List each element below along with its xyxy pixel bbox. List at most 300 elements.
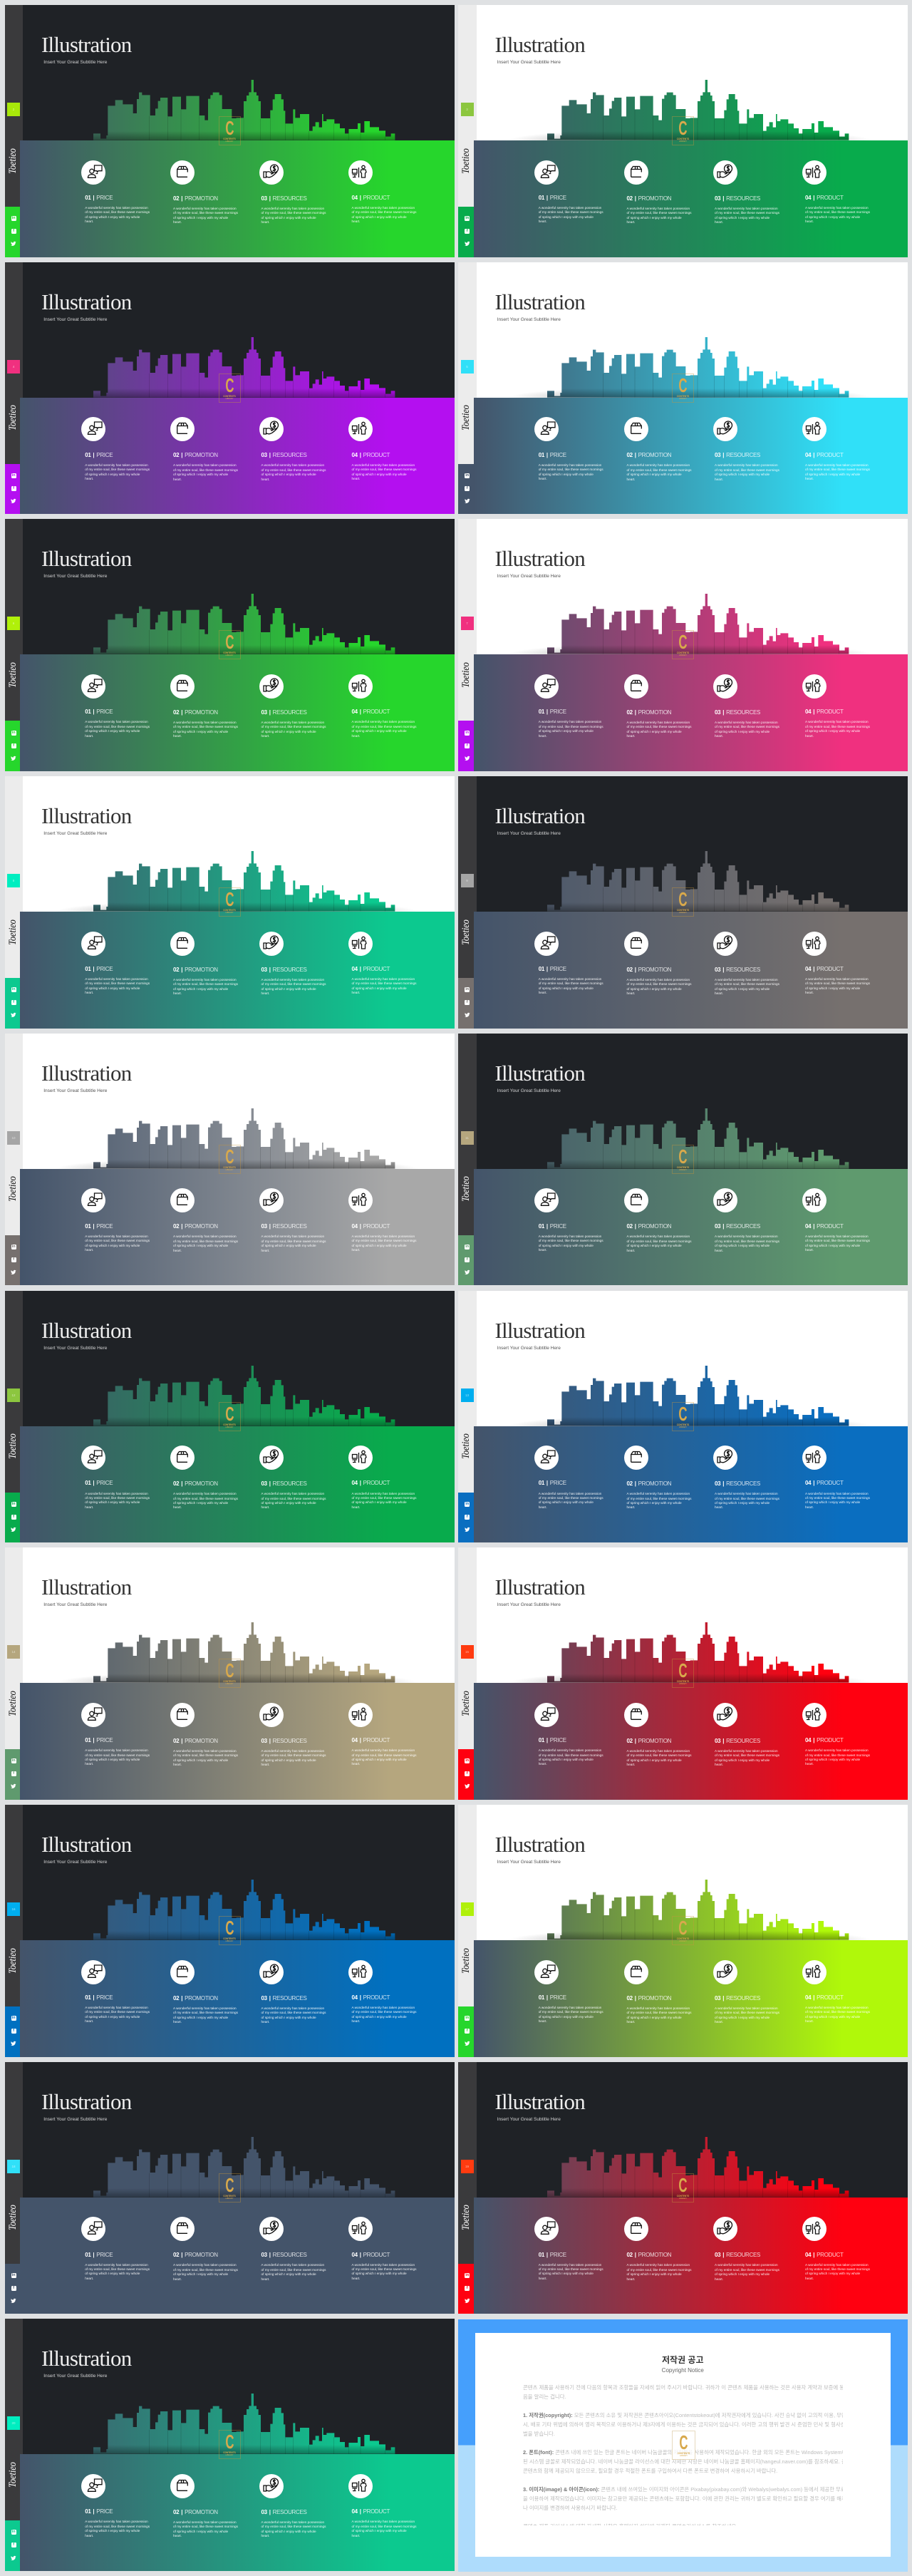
brand: Toetieo bbox=[460, 2205, 471, 2230]
feature 04 bbox=[802, 1446, 886, 1517]
feature 01: A wonderful serenity has taken possession bbox=[85, 2520, 148, 2523]
feature 03: of my entire soul, like these sweet mornings bbox=[715, 1497, 779, 1500]
brand: Toetieo bbox=[460, 1691, 471, 1716]
page number bbox=[460, 1131, 473, 1145]
skyline bbox=[93, 851, 395, 912]
notice text: 콘텐츠와 함께 제공되지 않으므로, 필요할 경우 적절한 폰트를 구입하여서 다른 폰트로 변경하여 사용하시기 바랍니다. bbox=[523, 2468, 777, 2474]
feature 03 bbox=[713, 160, 779, 224]
gradient panel bbox=[20, 1426, 455, 1542]
feature 01: of my entire soul, like these sweet mornings bbox=[539, 468, 603, 471]
feature 01: of spring which I enjoy with my whole bbox=[85, 729, 140, 733]
feature 01 bbox=[81, 674, 150, 738]
feature 01 bbox=[81, 932, 150, 994]
feature 02: of my entire soul, like these sweet mornings bbox=[173, 1240, 238, 1243]
logo badge: CONTENTS bbox=[677, 1423, 689, 1426]
panel: slide 5 light cyan bbox=[458, 262, 908, 514]
skyline bbox=[547, 594, 849, 654]
social icons: in bbox=[12, 1245, 16, 1249]
page number: 10 bbox=[11, 1136, 16, 1140]
feature 04: of my entire soul, like these sweet mornings bbox=[805, 725, 870, 728]
page number: 9 bbox=[466, 879, 468, 882]
feature 03: 03 | RESOURCES bbox=[261, 2252, 307, 2258]
feature 01: of spring which I enjoy with my whole bbox=[85, 473, 140, 476]
feature 01 bbox=[81, 2217, 165, 2288]
feature 02: 02 | PROMOTION bbox=[173, 452, 218, 458]
subtitle: Insert Your Great Subtitle Here bbox=[497, 1346, 561, 1350]
feature 02: heart. bbox=[627, 2277, 636, 2281]
social icons bbox=[458, 721, 473, 771]
feature 03: of spring which I enjoy with my whole bbox=[715, 473, 770, 476]
logo badge: LIBRARY bbox=[679, 1683, 687, 1685]
feature 04: of spring which I enjoy with my whole bbox=[352, 1500, 407, 1504]
subtitle: Insert Your Great Subtitle Here bbox=[497, 2117, 561, 2122]
title: Illustration bbox=[41, 1061, 131, 1086]
feature 01: heart. bbox=[85, 991, 93, 994]
panel: slide 20 dark teal bbox=[4, 2319, 455, 2571]
feature 04 bbox=[802, 2217, 886, 2288]
page number: 11 bbox=[465, 1136, 469, 1140]
feature 03: heart. bbox=[715, 220, 723, 224]
feature 01: 01 | PRICE bbox=[85, 452, 113, 458]
feature 01: of spring which I enjoy with my whole bbox=[85, 2529, 140, 2533]
social icons: in bbox=[12, 1758, 16, 1763]
feature 02 bbox=[624, 674, 691, 738]
feature 02 bbox=[170, 2474, 254, 2545]
feature 04: heart. bbox=[352, 1248, 361, 1252]
feature 03: 03 | RESOURCES bbox=[261, 1480, 307, 1487]
social icons: in bbox=[12, 2016, 16, 2020]
logo badge: LIBRARY bbox=[225, 654, 234, 656]
social icons: f bbox=[13, 1771, 14, 1776]
feature 01: of spring which I enjoy with my whole bbox=[539, 1244, 594, 1247]
feature 03 bbox=[713, 932, 779, 995]
feature 01: of my entire soul, like these sweet mornings bbox=[539, 725, 603, 728]
brand: Toetieo bbox=[6, 405, 18, 431]
social icons bbox=[4, 2520, 20, 2571]
feature 03: 03 | RESOURCES bbox=[261, 1738, 307, 1744]
feature 03: 03 | RESOURCES bbox=[261, 195, 307, 202]
feature 01: of spring which I enjoy with my whole bbox=[539, 2015, 594, 2019]
feature 03 bbox=[713, 674, 779, 738]
feature 04: of my entire soul, like these sweet mornings bbox=[805, 1496, 870, 1500]
feature 03 bbox=[712, 2217, 797, 2288]
skyline bbox=[546, 1350, 866, 1426]
feature 01: A wonderful serenity has taken possession bbox=[85, 2263, 148, 2267]
feature 01: 01 | PRICE bbox=[539, 452, 566, 458]
feature 02: A wonderful serenity has taken possession bbox=[173, 1235, 237, 1238]
feature 04: of my entire soul, like these sweet mornings bbox=[805, 468, 870, 471]
feature 02: A wonderful serenity has taken possession bbox=[627, 978, 690, 982]
social icons bbox=[4, 464, 20, 514]
feature 04: of spring which I enjoy with my whole bbox=[805, 473, 860, 476]
logo badge bbox=[218, 1145, 241, 1174]
sidebar bbox=[458, 262, 476, 464]
feature 02: of spring which I enjoy with my whole bbox=[173, 1758, 228, 1762]
feature 03: of spring which I enjoy with my whole bbox=[261, 1244, 316, 1247]
social icons bbox=[458, 1493, 473, 1542]
feature 02: A wonderful serenity has taken possession bbox=[173, 2263, 237, 2267]
feature 01: heart. bbox=[539, 2019, 547, 2023]
feature 03: 03 | RESOURCES bbox=[715, 1995, 760, 2001]
feature 03: of spring which I enjoy with my whole bbox=[261, 730, 316, 733]
feature 03: heart. bbox=[715, 2277, 723, 2281]
feature 02 bbox=[624, 1446, 708, 1517]
feature 02: heart. bbox=[173, 220, 182, 224]
feature 03 bbox=[259, 1188, 343, 1259]
feature 01 bbox=[534, 1446, 618, 1517]
logo badge bbox=[672, 630, 694, 659]
feature 01: A wonderful serenity has taken possession bbox=[539, 720, 601, 723]
feature 03: of my entire soul, like these sweet mornings bbox=[261, 1240, 326, 1243]
feature 03: of spring which I enjoy with my whole bbox=[715, 1244, 770, 1247]
feature 04: A wonderful serenity has taken possession bbox=[805, 463, 869, 467]
feature 03: heart. bbox=[261, 734, 269, 738]
brand: Toetieo bbox=[460, 1948, 471, 1973]
feature 01: 01 | PRICE bbox=[85, 195, 113, 201]
social icons bbox=[4, 978, 20, 1028]
logo badge: C bbox=[225, 1403, 234, 1424]
feature 01: of my entire soul, like these sweet mornings bbox=[85, 2010, 150, 2014]
feature 01: A wonderful serenity has taken possession bbox=[85, 463, 148, 467]
skyline bbox=[93, 80, 395, 140]
feature 02 bbox=[170, 160, 238, 224]
feature 02: A wonderful serenity has taken possession bbox=[173, 2006, 237, 2010]
subtitle: Insert Your Great Subtitle Here bbox=[43, 1860, 107, 1865]
feature 03 bbox=[259, 1960, 343, 2031]
logo badge: LIBRARY bbox=[679, 398, 687, 400]
feature 02: of my entire soul, like these sweet mornings bbox=[173, 1753, 238, 1757]
feature 02: 02 | PROMOTION bbox=[173, 1480, 218, 1487]
logo badge bbox=[218, 1659, 241, 1688]
feature 04: of spring which I enjoy with my whole bbox=[805, 1500, 860, 1504]
feature 02: A wonderful serenity has taken possession bbox=[173, 978, 237, 982]
logo badge: CONTENTS bbox=[223, 1937, 236, 1940]
feature 03: A wonderful serenity has taken possession bbox=[261, 1235, 324, 1238]
logo badge: C bbox=[225, 1659, 234, 1681]
social icons: in bbox=[12, 473, 16, 478]
feature 04: A wonderful serenity has taken possession bbox=[352, 2520, 415, 2523]
feature 01 bbox=[81, 1703, 165, 1774]
feature 03: of my entire soul, like these sweet mornings bbox=[715, 2011, 779, 2014]
feature 03 bbox=[713, 417, 779, 481]
feature 01 bbox=[534, 417, 603, 480]
feature 02: 02 | PROMOTION bbox=[173, 1995, 218, 2001]
gradient panel bbox=[473, 140, 908, 257]
feature 04: 04 | PRODUCT bbox=[352, 709, 390, 715]
feature 03: of spring which I enjoy with my whole bbox=[715, 215, 770, 220]
social icons: in bbox=[465, 731, 469, 735]
page number bbox=[7, 2160, 20, 2173]
feature 01: A wonderful serenity has taken possession bbox=[85, 2006, 148, 2009]
feature 02: heart. bbox=[173, 478, 182, 481]
page number: 3 bbox=[466, 108, 468, 111]
feature 02: of spring which I enjoy with my whole bbox=[627, 1244, 682, 1247]
feature 03: of spring which I enjoy with my whole bbox=[261, 2016, 316, 2019]
subtitle: Insert Your Great Subtitle Here bbox=[43, 317, 107, 322]
feature 01: heart. bbox=[85, 1762, 93, 1766]
sidebar bbox=[458, 2062, 476, 2264]
page number bbox=[7, 617, 20, 630]
feature 01 bbox=[534, 2217, 618, 2288]
logo badge: CONTENTS bbox=[223, 651, 236, 654]
logo badge: CONTENTS bbox=[677, 395, 689, 398]
title: Illustration bbox=[494, 2089, 585, 2114]
feature 02 bbox=[624, 1703, 708, 1774]
feature 02: of spring which I enjoy with my whole bbox=[173, 1244, 228, 1247]
feature 04: 04 | PRODUCT bbox=[805, 2252, 844, 2258]
subtitle: Insert Your Great Subtitle Here bbox=[43, 2117, 107, 2122]
feature 01: 01 | PRICE bbox=[85, 2508, 113, 2515]
social icons: in bbox=[465, 2016, 469, 2020]
feature 01: A wonderful serenity has taken possession bbox=[539, 1492, 601, 1495]
feature 04: heart. bbox=[352, 1762, 361, 1766]
feature 02: heart. bbox=[173, 1763, 182, 1766]
page number: 14 bbox=[11, 1650, 16, 1654]
feature 03: of spring which I enjoy with my whole bbox=[261, 2272, 316, 2276]
feature 04 bbox=[348, 160, 416, 223]
logo badge: C bbox=[225, 117, 234, 139]
sidebar bbox=[4, 5, 23, 207]
title: Illustration bbox=[494, 1061, 585, 1086]
feature 01: 01 | PRICE bbox=[85, 709, 113, 715]
gradient panel bbox=[20, 2198, 455, 2314]
panel: slide 15 light red bbox=[458, 1547, 908, 1800]
subtitle: Insert Your Great Subtitle Here bbox=[497, 1602, 561, 1607]
feature 01: of my entire soul, like these sweet mornings bbox=[85, 1753, 150, 1757]
feature 03: A wonderful serenity has taken possession bbox=[261, 2006, 324, 2010]
feature 03: A wonderful serenity has taken possession bbox=[715, 463, 778, 467]
panel: slide 12 dark green bbox=[4, 1290, 455, 1542]
feature 03: of spring which I enjoy with my whole bbox=[261, 1758, 316, 1762]
panel: slide 2 dark green bbox=[4, 5, 455, 257]
feature 01: of my entire soul, like these sweet mornings bbox=[85, 1239, 150, 1242]
feature 02 bbox=[624, 1960, 708, 2031]
social icons: f bbox=[13, 2029, 14, 2033]
feature 02: 02 | PROMOTION bbox=[173, 709, 218, 716]
feature 02: of spring which I enjoy with my whole bbox=[627, 1501, 682, 1505]
sidebar bbox=[4, 1547, 23, 1749]
social icons: f bbox=[467, 2029, 468, 2033]
feature 02: 02 | PROMOTION bbox=[173, 1738, 218, 1744]
logo badge bbox=[218, 1916, 241, 1945]
feature 03: of spring which I enjoy with my whole bbox=[715, 1501, 770, 1505]
feature 04: heart. bbox=[352, 2277, 361, 2280]
feature 03: of my entire soul, like these sweet mornings bbox=[715, 211, 779, 215]
skyline bbox=[547, 80, 849, 140]
feature 03: A wonderful serenity has taken possession bbox=[261, 1492, 324, 1495]
feature 03: of my entire soul, like these sweet mornings bbox=[261, 982, 326, 986]
feature 03: of spring which I enjoy with my whole bbox=[715, 2016, 770, 2019]
feature 04: of my entire soul, like these sweet mornings bbox=[805, 2267, 870, 2271]
sidebar bbox=[458, 1034, 476, 1235]
feature 02 bbox=[624, 160, 691, 224]
feature 02: of my entire soul, like these sweet mornings bbox=[627, 1497, 691, 1500]
feature 01: heart. bbox=[85, 2019, 93, 2023]
title: Illustration bbox=[494, 546, 585, 571]
subtitle: Insert Your Great Subtitle Here bbox=[497, 317, 561, 322]
feature 03: heart. bbox=[261, 2020, 269, 2024]
feature 01: A wonderful serenity has taken possession bbox=[539, 2006, 601, 2009]
feature 02: A wonderful serenity has taken possession bbox=[627, 2263, 690, 2267]
social icons bbox=[4, 2264, 20, 2314]
page number bbox=[460, 1389, 473, 1401]
subtitle: Insert Your Great Subtitle Here bbox=[43, 2374, 107, 2379]
feature 02: of my entire soul, like these sweet mornings bbox=[627, 982, 691, 986]
gradient panel bbox=[20, 1683, 455, 1800]
skyline bbox=[546, 1864, 866, 1940]
social icons bbox=[4, 721, 20, 771]
page number: 15 bbox=[465, 1650, 469, 1654]
logo badge: CONTENTS bbox=[677, 1680, 689, 1683]
feature 02 bbox=[624, 1188, 708, 1259]
social icons: f bbox=[13, 2286, 14, 2290]
title: Illustration bbox=[41, 546, 131, 571]
feature 04: A wonderful serenity has taken possession bbox=[352, 463, 415, 467]
logo badge: LIBRARY bbox=[225, 1169, 234, 1171]
feature 01 bbox=[81, 160, 150, 223]
brand: Toetieo bbox=[6, 1691, 18, 1716]
subtitle: Insert Your Great Subtitle Here bbox=[497, 1860, 561, 1865]
panel: slide 18 dark navy bbox=[4, 2062, 455, 2314]
social icons: f bbox=[467, 743, 468, 748]
feature 04: A wonderful serenity has taken possession bbox=[805, 1748, 869, 1752]
logo badge: LIBRARY bbox=[679, 1169, 687, 1171]
feature 01: 01 | PRICE bbox=[539, 966, 566, 972]
feature 03: A wonderful serenity has taken possession bbox=[715, 978, 778, 982]
feature 01: A wonderful serenity has taken possession bbox=[85, 977, 148, 981]
feature 04 bbox=[348, 674, 416, 738]
title: Illustration bbox=[494, 1317, 585, 1343]
feature 01: of my entire soul, like these sweet mornings bbox=[539, 2267, 603, 2271]
panel: copyright notice bbox=[458, 2319, 908, 2572]
feature 03: heart. bbox=[261, 220, 269, 224]
feature 01: A wonderful serenity has taken possession bbox=[539, 977, 601, 981]
feature 03: of my entire soul, like these sweet mornings bbox=[261, 2525, 326, 2528]
logo badge: C bbox=[225, 2431, 234, 2453]
panel: slide 6 dark green bbox=[4, 519, 455, 771]
feature 03: A wonderful serenity has taken possession bbox=[261, 1749, 324, 1753]
feature 04: A wonderful serenity has taken possession bbox=[352, 2263, 415, 2267]
logo badge bbox=[218, 2430, 241, 2459]
notice text: 음을 알리는 겁니다. bbox=[523, 2394, 566, 2400]
panel: slide 19 dark red bbox=[458, 2062, 908, 2314]
feature 02: 02 | PROMOTION bbox=[627, 1738, 671, 1744]
feature 01: of spring which I enjoy with my whole bbox=[539, 986, 594, 990]
feature 02: of my entire soul, like these sweet mornings bbox=[627, 211, 691, 215]
feature 02: 02 | PROMOTION bbox=[627, 1223, 671, 1230]
social icons: f bbox=[13, 486, 14, 490]
feature 02 bbox=[170, 1960, 254, 2031]
feature 04: of spring which I enjoy with my whole bbox=[352, 473, 407, 476]
feature 02 bbox=[170, 674, 238, 738]
feature 04: 04 | PRODUCT bbox=[805, 1994, 844, 2001]
logo badge: CONTENTS bbox=[677, 909, 689, 912]
feature 03: heart. bbox=[261, 1763, 269, 1766]
logo badge: C bbox=[678, 1403, 688, 1424]
gradient panel bbox=[20, 1940, 455, 2057]
logo badge: CONTENTS bbox=[223, 2451, 236, 2454]
panel: slide 14 light tan bbox=[4, 1547, 455, 1800]
feature 04: heart. bbox=[805, 220, 814, 223]
feature 02: 02 | PROMOTION bbox=[627, 1480, 671, 1487]
feature 01: of spring which I enjoy with my whole bbox=[85, 215, 140, 219]
feature 03 bbox=[259, 1703, 343, 1774]
feature 03: heart. bbox=[715, 991, 723, 995]
feature 04: of spring which I enjoy with my whole bbox=[352, 1758, 407, 1761]
feature 03: of my entire soul, like these sweet mornings bbox=[261, 1753, 326, 1757]
logo badge: C bbox=[225, 2174, 234, 2196]
feature 04: of spring which I enjoy with my whole bbox=[352, 2529, 407, 2533]
feature 01: heart. bbox=[85, 2534, 93, 2538]
feature 04 bbox=[802, 674, 870, 738]
feature 04: of spring which I enjoy with my whole bbox=[352, 2272, 407, 2275]
panel: slide 10 light gray bbox=[4, 1034, 455, 1285]
feature 03: 03 | RESOURCES bbox=[715, 1738, 760, 1744]
social icons bbox=[458, 2264, 473, 2314]
heading: 저작권 공고 bbox=[662, 2355, 704, 2365]
page number bbox=[7, 360, 20, 373]
feature 04: A wonderful serenity has taken possession bbox=[352, 977, 415, 981]
feature 03: 03 | RESOURCES bbox=[261, 452, 307, 458]
feature 02: heart. bbox=[627, 220, 636, 224]
social icons bbox=[4, 207, 20, 257]
feature 01: A wonderful serenity has taken possession bbox=[85, 1492, 148, 1495]
social icons: f bbox=[13, 1000, 14, 1004]
logo badge bbox=[672, 373, 694, 403]
logo badge: LIBRARY bbox=[225, 140, 234, 143]
feature 03 bbox=[259, 932, 326, 995]
feature 02: A wonderful serenity has taken possession bbox=[627, 463, 690, 467]
logo badge: LIBRARY bbox=[679, 1426, 687, 1428]
feature 02: 02 | PROMOTION bbox=[627, 709, 671, 716]
logo watermark: CONTENTS bbox=[678, 2452, 690, 2455]
feature 04 bbox=[802, 1960, 886, 2031]
feature 02 bbox=[170, 1446, 254, 1517]
feature 01: A wonderful serenity has taken possession bbox=[85, 206, 148, 210]
feature 01: of my entire soul, like these sweet mornings bbox=[85, 468, 150, 471]
feature 04: of spring which I enjoy with my whole bbox=[352, 1244, 407, 1247]
feature 01: heart. bbox=[539, 477, 547, 480]
feature 01: A wonderful serenity has taken possession bbox=[539, 1748, 601, 1752]
logo badge: C bbox=[678, 117, 688, 139]
feature 04: A wonderful serenity has taken possession bbox=[805, 720, 869, 723]
logo badge: CONTENTS bbox=[223, 1423, 236, 1426]
feature 03: 03 | RESOURCES bbox=[261, 2509, 307, 2515]
subtitle: Insert Your Great Subtitle Here bbox=[43, 831, 107, 836]
feature 01: of my entire soul, like these sweet mornings bbox=[539, 210, 603, 214]
feature 02: heart. bbox=[173, 2534, 182, 2538]
logo badge: CONTENTS bbox=[677, 138, 689, 140]
page number: 4 bbox=[13, 365, 14, 369]
sidebar bbox=[4, 1290, 23, 1493]
feature 03: A wonderful serenity has taken possession bbox=[715, 721, 778, 724]
feature 03: of spring which I enjoy with my whole bbox=[715, 730, 770, 733]
feature 02: 02 | PROMOTION bbox=[173, 2252, 218, 2258]
page number: 8 bbox=[13, 879, 14, 882]
feature 02: A wonderful serenity has taken possession bbox=[173, 463, 237, 467]
feature 04: of spring which I enjoy with my whole bbox=[352, 215, 407, 219]
feature 03: heart. bbox=[715, 1249, 723, 1252]
feature 04: heart. bbox=[805, 2019, 814, 2023]
gradient panel bbox=[473, 912, 908, 1028]
logo badge: CONTENTS bbox=[677, 1166, 689, 1169]
skyline bbox=[93, 1864, 413, 1940]
feature 02 bbox=[170, 932, 238, 995]
subtitle: Insert Your Great Subtitle Here bbox=[43, 1602, 107, 1607]
feature 04: A wonderful serenity has taken possession bbox=[352, 2006, 415, 2009]
feature 04: A wonderful serenity has taken possession bbox=[805, 2263, 869, 2267]
logo badge bbox=[672, 116, 694, 145]
